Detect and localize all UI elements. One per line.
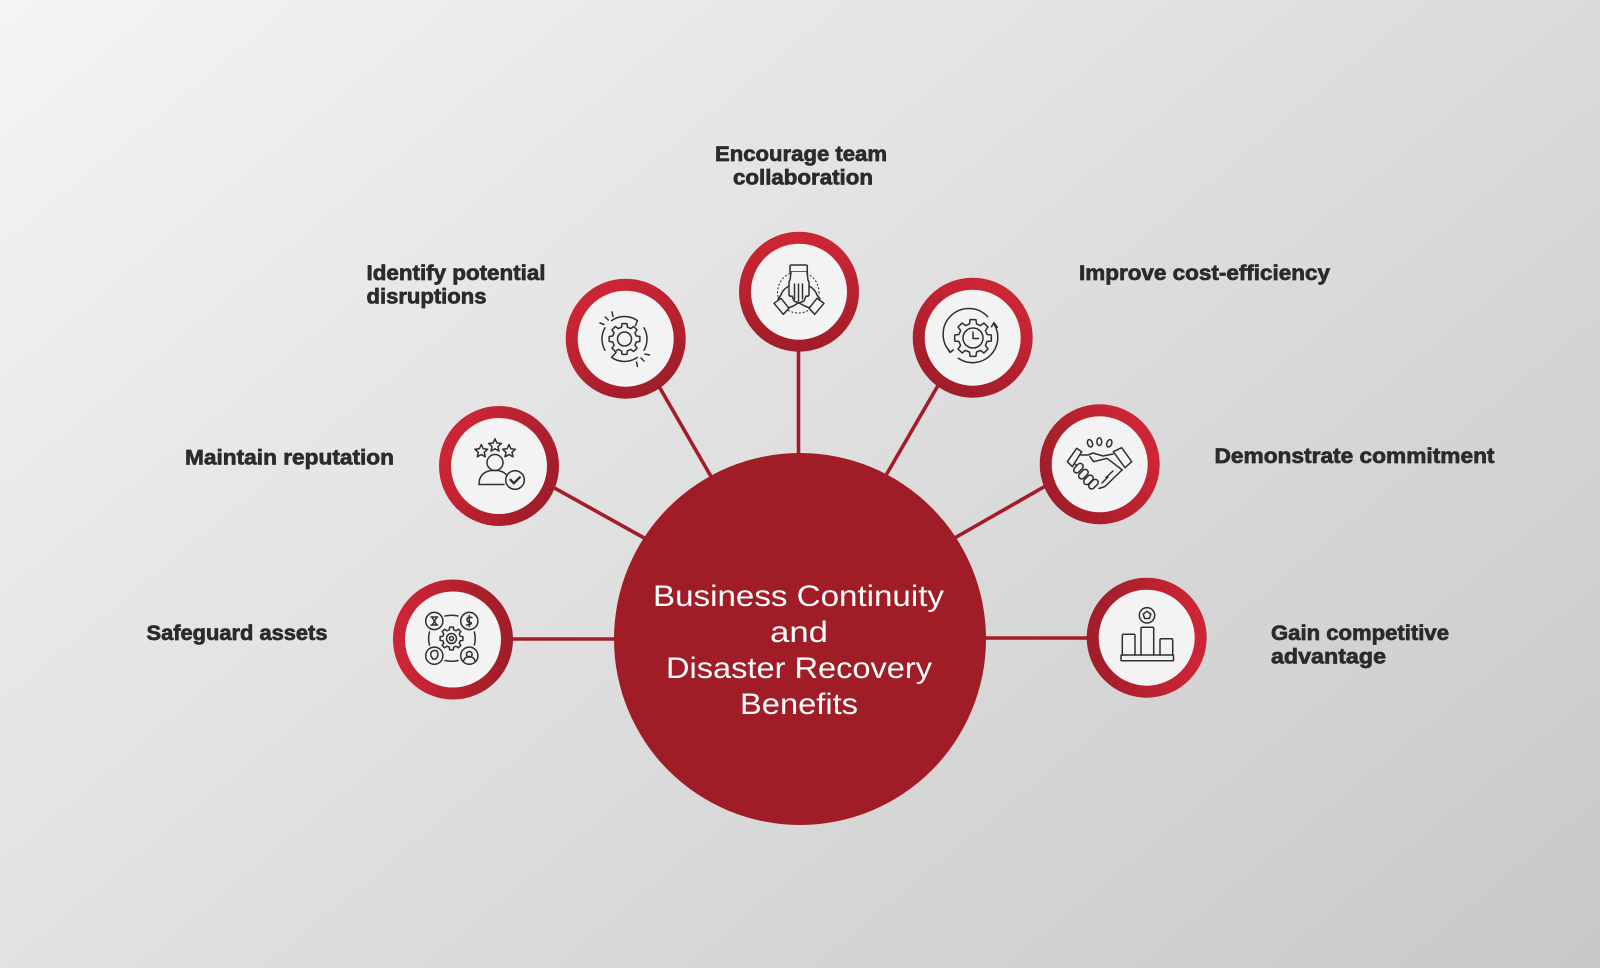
- icon: gear with clock: [943, 308, 998, 363]
- label: safeguard assets: Safeguard assets: [146, 622, 328, 645]
- label: maintain reputation: Maintain reputation: [185, 446, 394, 470]
- label: encourage team collaboration: Encourage team: [715, 143, 887, 166]
- node: demonstrate commitment: [1040, 404, 1160, 524]
- label: identify potential disruptions: Identify potential: [366, 262, 546, 285]
- node: identify potential disruptions: [566, 279, 686, 399]
- hub title: and: [770, 616, 828, 649]
- icon: person with stars and check: [475, 439, 524, 489]
- node: safeguard assets: [393, 580, 513, 700]
- hub title: Business Continuity: [653, 580, 944, 613]
- hub title: Benefits: [740, 688, 858, 721]
- label: demonstrate commitment: Demonstrate commitment: [1214, 445, 1494, 468]
- icon: gear with rotating arrows: [600, 312, 650, 366]
- icon: podium with medal: [1121, 608, 1174, 661]
- label: gain competitive advantage: Gain competitive: [1271, 622, 1449, 645]
- label: encourage team collaboration: [715, 143, 887, 190]
- connector lines: [500, 340, 1100, 639]
- label: encourage team collaboration: collaboration: [733, 166, 873, 190]
- node: gain competitive advantage: [1087, 578, 1207, 698]
- label: identify potential disruptions: disruptions: [366, 286, 486, 308]
- hub title: [653, 580, 944, 721]
- label: gain competitive advantage: [1271, 622, 1449, 668]
- label: identify potential disruptions: [366, 262, 546, 308]
- central hub: [614, 453, 986, 825]
- icon: three hands together: [774, 265, 824, 314]
- node: improve cost-efficiency: [913, 278, 1033, 398]
- label: gain competitive advantage: advantage: [1271, 646, 1386, 668]
- icon: handshake: [1067, 438, 1132, 490]
- hub title: Disaster Recovery: [666, 652, 932, 685]
- label: improve cost-efficiency: Improve cost-efficiency: [1079, 262, 1330, 285]
- node: maintain reputation: [439, 406, 559, 526]
- node: encourage team collaboration: [739, 232, 859, 352]
- icon: gear with four assets: [426, 612, 478, 664]
